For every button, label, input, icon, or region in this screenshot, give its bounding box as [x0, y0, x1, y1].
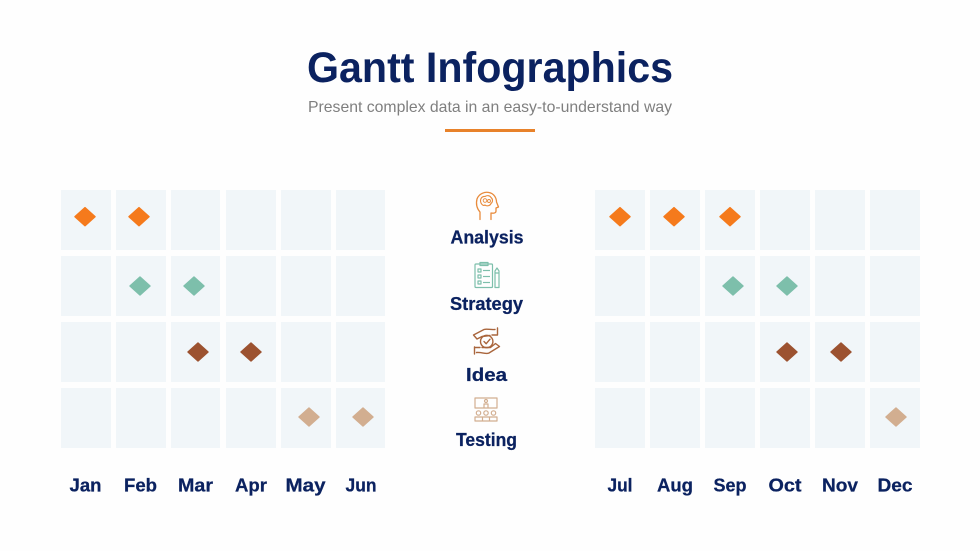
left month labels	[70, 476, 376, 496]
left month labels: May	[286, 476, 326, 496]
subtitle: Present complex data in an easy-to-understand way	[308, 99, 672, 116]
left gantt markers	[75, 208, 373, 426]
icon: presentation screen and audience	[475, 398, 497, 421]
right month labels: Jul	[608, 476, 632, 496]
label: Strategy: Strategy	[450, 294, 523, 314]
right month labels: Dec	[878, 476, 912, 496]
right month labels	[608, 476, 912, 496]
right month labels: Oct	[768, 476, 802, 496]
icon: hands holding check badge	[474, 328, 500, 354]
right gantt markers	[610, 208, 906, 426]
left month labels: Apr	[235, 476, 267, 496]
label: Testing: Testing	[456, 430, 517, 450]
right gantt grid: Jul to Dec	[595, 190, 920, 448]
title underline	[445, 129, 535, 132]
left month labels: Jan	[70, 476, 102, 496]
right month labels: Nov	[822, 476, 858, 496]
title: Gantt Infographics	[307, 44, 673, 92]
label: Analysis: Analysis	[450, 228, 524, 248]
label: Idea: Idea	[466, 365, 508, 385]
left gantt grid: Jan to Jun	[61, 190, 385, 448]
left month labels: Mar	[178, 476, 213, 496]
right month labels: Aug	[657, 476, 693, 496]
left month labels: Jun	[346, 476, 376, 496]
right month labels: Sep	[714, 476, 747, 496]
left month labels: Feb	[124, 476, 157, 496]
icon: clipboard checklist and pencil	[475, 262, 499, 288]
icon: head with brain	[477, 192, 498, 220]
